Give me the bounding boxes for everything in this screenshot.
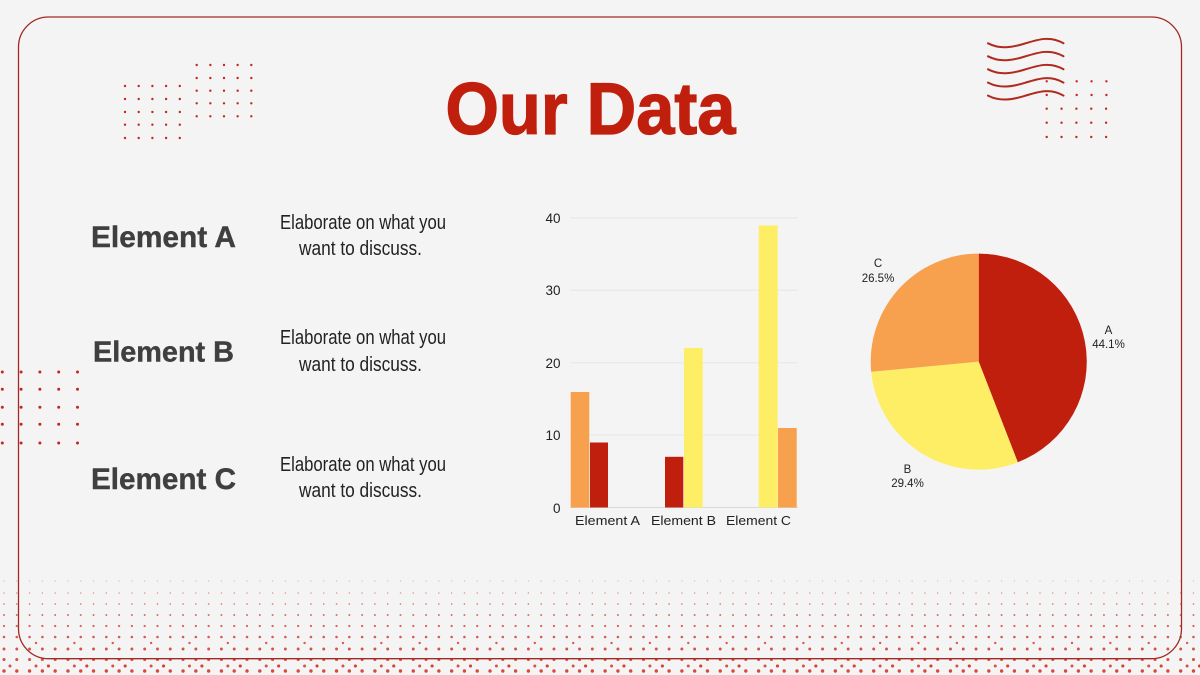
dot grid: top right	[1047, 81, 1108, 137]
label: C: C	[874, 258, 882, 270]
bars: Element A	[571, 392, 608, 508]
dot grid: top centre left	[197, 65, 253, 116]
wavy lines decoration	[988, 39, 1064, 100]
dot grid: left edge	[2, 372, 80, 443]
label: B: 29.4%	[891, 478, 924, 490]
x axis labels: Element C	[726, 513, 791, 528]
label: B	[891, 464, 924, 490]
label: A: 44.1%	[1092, 339, 1125, 351]
x axis labels: Element B	[651, 513, 716, 528]
slice: C	[871, 254, 979, 372]
label: B: B	[904, 464, 912, 476]
y axis labels: 20	[545, 356, 560, 371]
pie chart	[862, 254, 1125, 490]
dot grid: top left	[125, 86, 182, 138]
text block: Element A description	[280, 212, 446, 260]
text block: Element C description: want to discuss.	[298, 480, 422, 502]
bar chart	[545, 211, 798, 528]
heading: Element C: Element C	[91, 463, 236, 496]
row: Element A	[91, 212, 446, 260]
label: C: 26.5%	[862, 273, 894, 285]
x axis labels: Element A	[575, 513, 640, 528]
bottom halftone dot pattern	[4, 581, 1200, 671]
y axis labels: 10	[545, 428, 560, 443]
bars: Element B	[665, 348, 703, 508]
text block: Element A description: want to discuss.	[298, 238, 422, 260]
x axis labels	[575, 513, 791, 528]
heading: Element A: Element A	[91, 221, 236, 254]
title: Our Data	[446, 69, 737, 150]
label: C	[862, 258, 894, 285]
text block: Element C description: Elaborate on what you	[280, 454, 446, 476]
y axis labels: 30	[545, 283, 560, 298]
slice: A	[979, 254, 1087, 462]
y axis labels: 40	[545, 211, 560, 226]
text block: Element C description	[280, 454, 446, 502]
text block: Element B description: Elaborate on what you	[280, 327, 446, 349]
text block: Element A description: Elaborate on what you	[280, 212, 446, 234]
label: A	[1092, 325, 1125, 351]
bars: Element C	[759, 226, 797, 508]
y axis labels	[545, 211, 560, 516]
text block: Element B description	[280, 327, 446, 376]
row: Element B	[93, 327, 446, 376]
text block: Element B description: want to discuss.	[298, 354, 422, 376]
y axis labels: 0	[553, 501, 560, 516]
row: Element C	[91, 454, 446, 502]
label: A: A	[1105, 325, 1113, 337]
slice: B	[871, 362, 1018, 470]
heading: Element B: Element B	[93, 336, 234, 368]
